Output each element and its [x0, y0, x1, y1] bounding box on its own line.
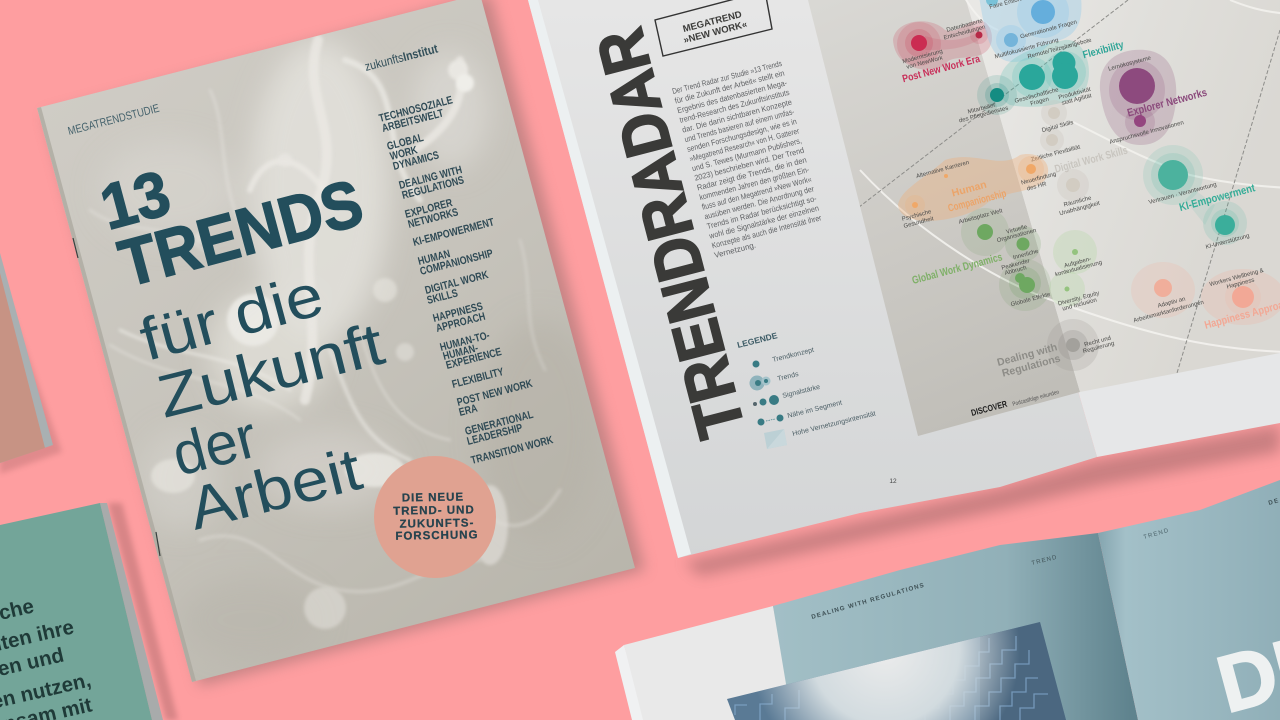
trend list: HUMAN-: [442, 342, 480, 363]
cluster: Digital Work Skills: Räumliche: [1063, 195, 1093, 209]
trend list: NETWORKS: [407, 206, 460, 231]
booklet: green page, bottom left: [0, 503, 178, 720]
logo: zukunftsInstitut: zukunftsInstitut: [363, 42, 439, 74]
cover title: [93, 156, 391, 543]
intro text: Der Trend Radar zur Studie »13 Trends: [671, 59, 783, 96]
header: Trend left: TREND: [1031, 555, 1058, 567]
radar panel: right half: [966, 0, 1280, 392]
trend list: COMPANIONSHIP: [419, 248, 495, 278]
intro text: für die Zukunft der Arbeit« stellt ein: [674, 69, 785, 106]
cluster: Global Work Dynamics: [911, 208, 1103, 313]
legend: Trends: Trends: [777, 371, 800, 383]
intro text: »Megatrend Research« von H. Gatterer: [689, 126, 800, 163]
intro text: dar. Die darin sichtbaren Konzepte: [681, 97, 793, 135]
cover title: für die: [133, 261, 330, 374]
cluster: Happiness Approach: Adaptiv an: [1157, 296, 1186, 310]
header: Trend right: TREND: [1143, 528, 1170, 541]
trend list: WORK: [389, 144, 420, 163]
trend list: APPROACH: [435, 311, 487, 335]
intro text: Konzepte als auch die Intensität ihrer: [711, 213, 823, 250]
intro text: 2023) beschrieben wird. Der Trend: [693, 146, 805, 183]
staple marks: [73, 238, 160, 556]
cluster: Flexibility: statt Agilität: [1061, 93, 1093, 107]
trend list: GENERATIONAL: [464, 409, 535, 438]
intro text: Trends im Radar berücksichtigt so-: [706, 194, 818, 231]
cluster: Happiness Approach: Workers Wellbeing &: [1209, 268, 1264, 288]
cover fluid artwork: [37, 40, 600, 682]
cluster: KI-Empowerment: KI-Unterstützung: [1205, 233, 1250, 251]
badge: neue Trendforschung: [374, 456, 496, 578]
cluster: Global Work Dynamics: Aufgaben-: [1064, 257, 1092, 270]
legend: Signalstärke: [753, 384, 821, 406]
blue right page: [1098, 480, 1280, 720]
trend list: DEALING WITH: [398, 164, 464, 192]
trend list: TECHNOSOZIALE: [378, 94, 454, 125]
cluster: Global Work Dynamics: Globale Effekte: [1010, 292, 1052, 308]
shadow of cover: [45, 0, 645, 686]
radar panel: left half: [808, 0, 1080, 436]
legend: LEGENDE: [736, 330, 779, 350]
cluster: Global Work Dynamics: Organisationen: [996, 228, 1037, 244]
box: Megatrend New Work: MEGATREND: [682, 9, 743, 35]
legend: [736, 330, 877, 449]
cluster: Human Companionship: Psychische: [901, 209, 933, 223]
cluster: Digital Work Skills: Digital Work Skills: [1053, 145, 1129, 176]
trend list: TRANSITION WORK: [470, 434, 555, 467]
badge: neue Trendforschung: DIE NEUE: [402, 491, 464, 505]
intro text: kommenden Jahren den größten Ein-: [698, 165, 810, 202]
cover title: TRENDS: [111, 165, 370, 301]
cluster: Digital Work Skills: Zeitliche Flexibilität: [1030, 144, 1081, 163]
badge: neue Trendforschung: FORSCHUNG: [395, 529, 479, 543]
cluster: Human Companionship: Companionship: [947, 188, 1008, 215]
cluster: KI-Empowerment: [1143, 145, 1257, 251]
cluster: Global Work Dynamics: Abbruch: [1004, 265, 1027, 277]
right page: [966, 0, 1280, 457]
cluster: Post New Work Era: Post New Work Era: [901, 53, 982, 85]
intro text: senden Forschungsdesign, wie es in: [686, 117, 798, 154]
discover link: Podcastfolge erkunden: [1012, 390, 1060, 408]
intro text: und Trends basieren auf einem umfas-: [684, 107, 796, 144]
intro text: Radar zeigt die Trends, die in den: [696, 155, 808, 192]
legend: Trends: [750, 371, 800, 390]
cluster: Generational Leadership blue: Generationale Fragen: [1020, 20, 1078, 40]
cluster: Post New Work Era: [893, 18, 992, 85]
cluster: KI-Empowerment: Vertrauen · Verantwortung: [1148, 182, 1217, 206]
trend list: POST NEW WORK: [456, 378, 535, 409]
cluster: Flexibility: Gesellschaftliche: [1014, 87, 1060, 105]
cluster: Flexibility: [999, 37, 1125, 107]
trend list: HUMAN-TO-: [439, 330, 491, 354]
cluster: Human Companionship: des HR: [1026, 181, 1048, 193]
trend list: SKILLS: [426, 288, 460, 307]
intro text: trend-Research des Zukunftsinstituts: [679, 88, 790, 125]
cluster: Dealing with Regulations: Dealing with: [996, 341, 1059, 369]
discover link: [970, 390, 1059, 416]
cluster: Human Companionship: Alternative Karrieren: [916, 160, 970, 180]
cluster: Global Work Dynamics: kontextualisierung: [1055, 260, 1103, 278]
cluster: Human-to-Human teal dot: des Pflegedienstes: [958, 106, 1009, 124]
magazine cover: [37, 0, 635, 682]
cluster: Flexibility: Flexibility: [1081, 39, 1125, 61]
shadow of open spread: [684, 425, 1280, 576]
left page: [528, 0, 1097, 558]
cluster: Explorer Networks: Lernökosysteme: [1108, 55, 1152, 73]
page number: 12: [889, 478, 897, 485]
cluster: Global Work Dynamics: Diversity, Equity: [1057, 291, 1100, 307]
page edge strip: [528, 0, 691, 558]
cluster: Generational Leadership blue: [978, 0, 1082, 62]
legend: Nähe im Segment: Nähe im Segment: [787, 400, 843, 420]
cluster: Global Work Dynamics: und Inclusion: [1062, 298, 1098, 313]
intro text: [671, 59, 823, 260]
cluster: Dealing with Regulations: [996, 319, 1115, 380]
cluster: Human-to-Human teal dot: Mitarbeiter: [967, 102, 996, 116]
cluster: KI-Empowerment: KI-Empowerment: [1178, 182, 1257, 214]
legend: Nähe im Segment: [758, 400, 843, 426]
cluster: Dealing with Regulations: Regulations: [1001, 352, 1062, 380]
trend list: [378, 94, 555, 467]
intro text: Vernetzung.: [713, 241, 757, 260]
trend list: KI-EMPOWERMENT: [412, 217, 496, 249]
cluster: Digital Work Skills: Unabhängigkeit: [1059, 201, 1101, 217]
blue left page: [773, 533, 1138, 720]
lower magazine spread: [615, 480, 1280, 720]
cluster: Digital Work Skills: Digital Skills: [1041, 120, 1074, 134]
trend list: EXPLORER: [404, 197, 455, 221]
trend list: DYNAMICS: [392, 150, 441, 173]
trend list: ARBEITSWELT: [381, 108, 445, 135]
discover link: DISCOVER: [970, 399, 1009, 418]
cluster: Explorer Networks: Anspruchsvolle Innovationen: [1109, 120, 1185, 146]
header: Dealing with Regulations: DEALING WITH REGULATIONS: [811, 582, 926, 621]
cover label: Megatrendstudie: MEGATRENDSTUDIE: [67, 102, 161, 138]
box: Megatrend New Work: [655, 0, 772, 56]
trend list: LEADERSHIP: [466, 422, 524, 448]
cluster: Dealing with Regulations: Recht und: [1084, 336, 1112, 348]
cluster: Happiness Approach: [1131, 262, 1280, 332]
green page text: [0, 594, 94, 720]
intro text: ausüben werden. Die Anordnung der: [703, 184, 815, 221]
cluster: Happiness Approach: Arbeitsmarktanforderungen: [1133, 300, 1205, 324]
cluster: Human Companionship: Gesundheit: [903, 216, 935, 230]
cluster: Generational Leadership blue: Multifokussierte Führung: [994, 38, 1059, 60]
cluster: Human Companionship: Neuerfindung: [1021, 171, 1057, 187]
cluster: Human-to-Human teal dot: [958, 75, 1017, 124]
trend list: ERA: [458, 403, 479, 419]
trend list: FLEXIBILITY: [451, 366, 505, 391]
cluster: Flexibility: Fragen: [1030, 97, 1050, 107]
intro text: und S. Tewes (Murmann Publishers,: [691, 136, 803, 173]
cluster: Flexibility: Remote/Teilzeitangebote: [1027, 37, 1093, 60]
cluster: Digital Work Skills: [1030, 100, 1129, 217]
trend list: DIGITAL WORK: [424, 269, 490, 297]
cover title: 13: [93, 156, 177, 244]
badge: neue Trendforschung: ZUKUNFTS-: [399, 517, 474, 531]
box: Megatrend New Work: »NEW WORK«: [682, 19, 748, 46]
cluster: Post New Work Era: Entscheidungen: [943, 25, 986, 42]
cluster: Global Work Dynamics: Global Work Dynamics: [911, 251, 1004, 287]
cover title: Arbeit: [182, 435, 368, 543]
cluster: Explorer Networks: Explorer Networks: [1126, 87, 1208, 120]
cluster: Post New Work Era: von NewWork: [906, 55, 944, 71]
cluster: Flexibility: Produktivität: [1058, 87, 1092, 101]
cluster: Happiness Approach: Happiness: [1226, 277, 1255, 291]
radar chart: [850, 0, 1280, 418]
open magazine spread: [528, 0, 1280, 558]
legend: Hohe Vernetzungsintensität: [764, 410, 877, 449]
cluster: Human Companionship: Human: [950, 179, 988, 200]
cluster: Post New Work Era: Datenbasierte: [946, 18, 984, 34]
cluster: Dealing with Regulations: Regulierung: [1082, 341, 1115, 355]
trend list: EXPERIENCE: [445, 346, 503, 372]
legend: Hohe Vernetzungsintensität: Hohe Vernetzungsintensität: [792, 410, 877, 438]
badge: neue Trendforschung: TREND- UND: [393, 504, 475, 518]
legend: Signalstärke: Signalstärke: [782, 384, 821, 400]
maze photo: [727, 622, 1066, 720]
trend list: HAPPINESS: [432, 301, 485, 325]
cluster: Human Companionship: [898, 154, 1057, 230]
intro text: Ergebnis des datenbasierten Mega-: [676, 78, 788, 115]
cluster: Global Work Dynamics: Arbeitsplatz Welt: [958, 208, 1004, 226]
legend: Trendkonzept: Trendkonzept: [772, 347, 815, 364]
booklet: salmon cover, top left: [0, 253, 62, 474]
trend list: GLOBAL: [386, 132, 425, 153]
trend list: REGULATIONS: [401, 174, 466, 202]
cover title: Zukunft: [151, 310, 391, 431]
trend list: HUMAN: [417, 248, 452, 268]
cluster: Global Work Dynamics: Virtuelle: [1006, 224, 1029, 236]
legend: Trendkonzept: [752, 347, 815, 368]
intro text: wohl die Signalstärke der einzelnen: [707, 204, 820, 241]
intro text: fluss auf den Megatrend »New Work«: [701, 175, 813, 212]
cluster: Explorer Networks: [1100, 50, 1208, 146]
cluster: Global Work Dynamics: Peakender: [1001, 258, 1031, 272]
white left page: [624, 606, 795, 720]
cluster: Global Work Dynamics: Innerliche: [1012, 249, 1040, 261]
cover title: der: [165, 403, 264, 489]
cluster: Post New Work Era: Modernisierung: [902, 49, 943, 65]
